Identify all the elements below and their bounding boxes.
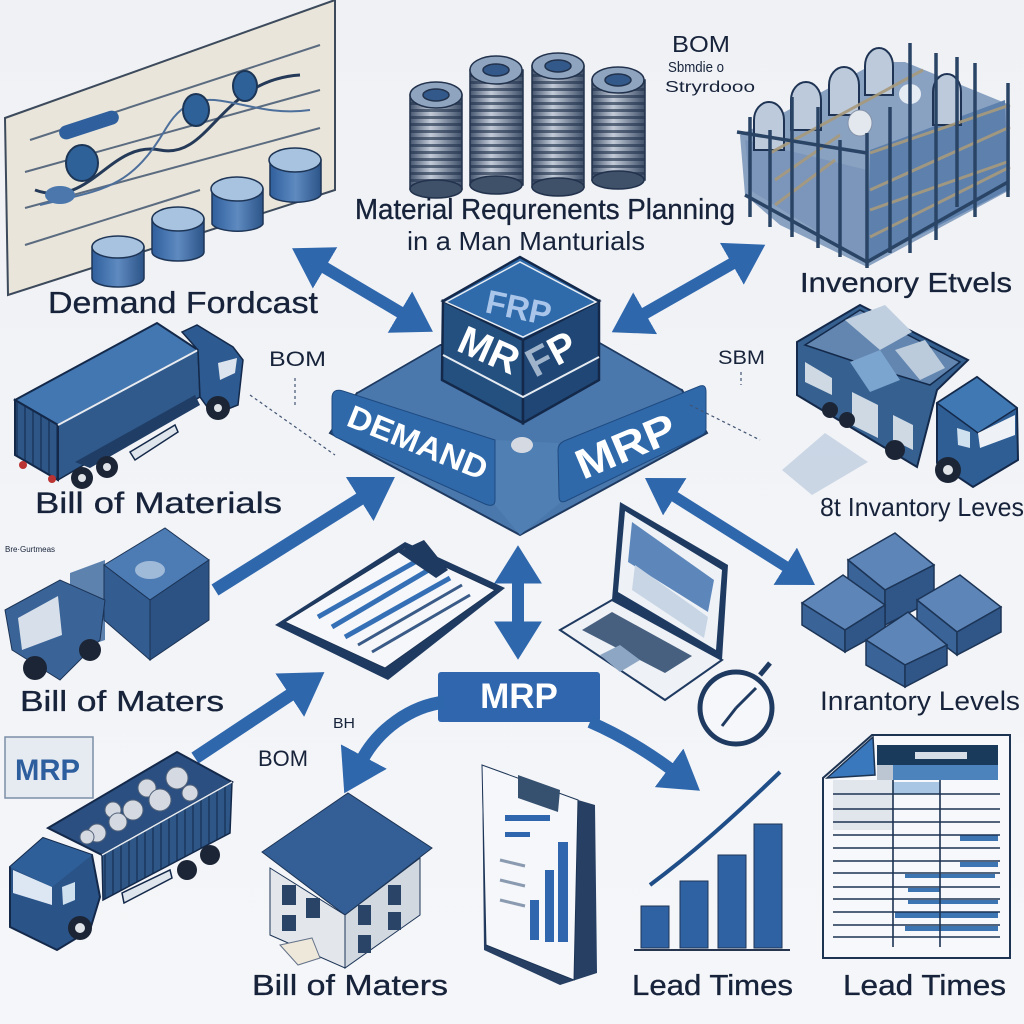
text: BOM note: Stryrdooo [665,79,755,96]
text: BH: BH [333,715,355,732]
icon: dump truck [10,752,232,950]
arrow: vertical [512,580,524,625]
icon: inventory boxes [802,533,1001,687]
badge: demand [332,390,495,505]
heading: lead times table: Lead Times [843,970,1006,1002]
icon: truck with crate [5,528,209,680]
icon: database cylinders [92,148,321,287]
icon: inventory racks [737,43,1010,268]
icon: laptop [560,502,728,700]
text: BOM right [690,348,765,440]
text: BOM note: BOM [672,31,730,57]
text: BOM left [250,348,335,455]
heading: inventory levels low: Inrantory Levels [820,686,1020,716]
badge: MRP center [438,672,600,722]
arrow: inventory to MRP [642,262,735,315]
label: cube left MR: MR [451,318,526,384]
icon: lead time bar chart [634,772,790,950]
arrow: left to platform [215,497,363,590]
heading: bill of maters mid: Bill of Maters [20,686,224,718]
heading: lead times chart: Lead Times [632,970,793,1002]
text: BOM lower: BOM [258,746,308,771]
table: lead times [823,735,1010,958]
icon: clipboard document [275,540,505,680]
text: small note left: Bre·Gurtmeas [5,545,55,554]
text: BOM note [665,31,755,96]
title: Material Requrenents Planning [355,194,735,226]
arrow: MRP to truck [362,702,445,760]
arrow: dump truck up [195,693,293,758]
icon: faded sketch [782,433,868,495]
label: cube top: FRP [483,283,555,333]
title: in a Man Manturials [407,226,645,256]
text: BOM note: Sbmdie o [668,59,724,76]
badge: MRP left [5,737,93,798]
badge: MRP: MRP [568,404,683,488]
arrow: MRP to lead times [590,722,672,770]
icon: warehouse building [262,793,432,968]
icon: truck, bill of materials [15,323,243,489]
heading: bill of maters low: Bill of Maters [252,970,448,1002]
arrow: demand to MRP [322,266,403,314]
heading: bill of materials: Bill of Materials [35,487,282,520]
icon: stacks of materials [410,53,645,198]
arrow: platform to boxes [672,495,788,568]
icon: stopwatch [700,663,772,744]
badge: MRP left: MRP [15,754,80,787]
title [355,194,735,256]
text: BOM left: BOM [269,348,326,371]
heading: inventory levels top: Invenory Etvels [800,267,1012,298]
badge: demand: DEMAND [342,398,493,487]
label: cube right FP: FP [519,323,584,386]
badge: MRP [558,386,706,502]
heading: demand forecast: Demand Fordcast [48,285,318,320]
text: BOM right: SBM [718,348,765,369]
icon: truck, inventory right [797,305,1018,487]
panel: central MRP platform [330,257,707,535]
badge: MRP center: MRP [480,677,558,716]
icon: report with bar chart [482,765,597,985]
panel: demand forecast chart [5,0,335,295]
